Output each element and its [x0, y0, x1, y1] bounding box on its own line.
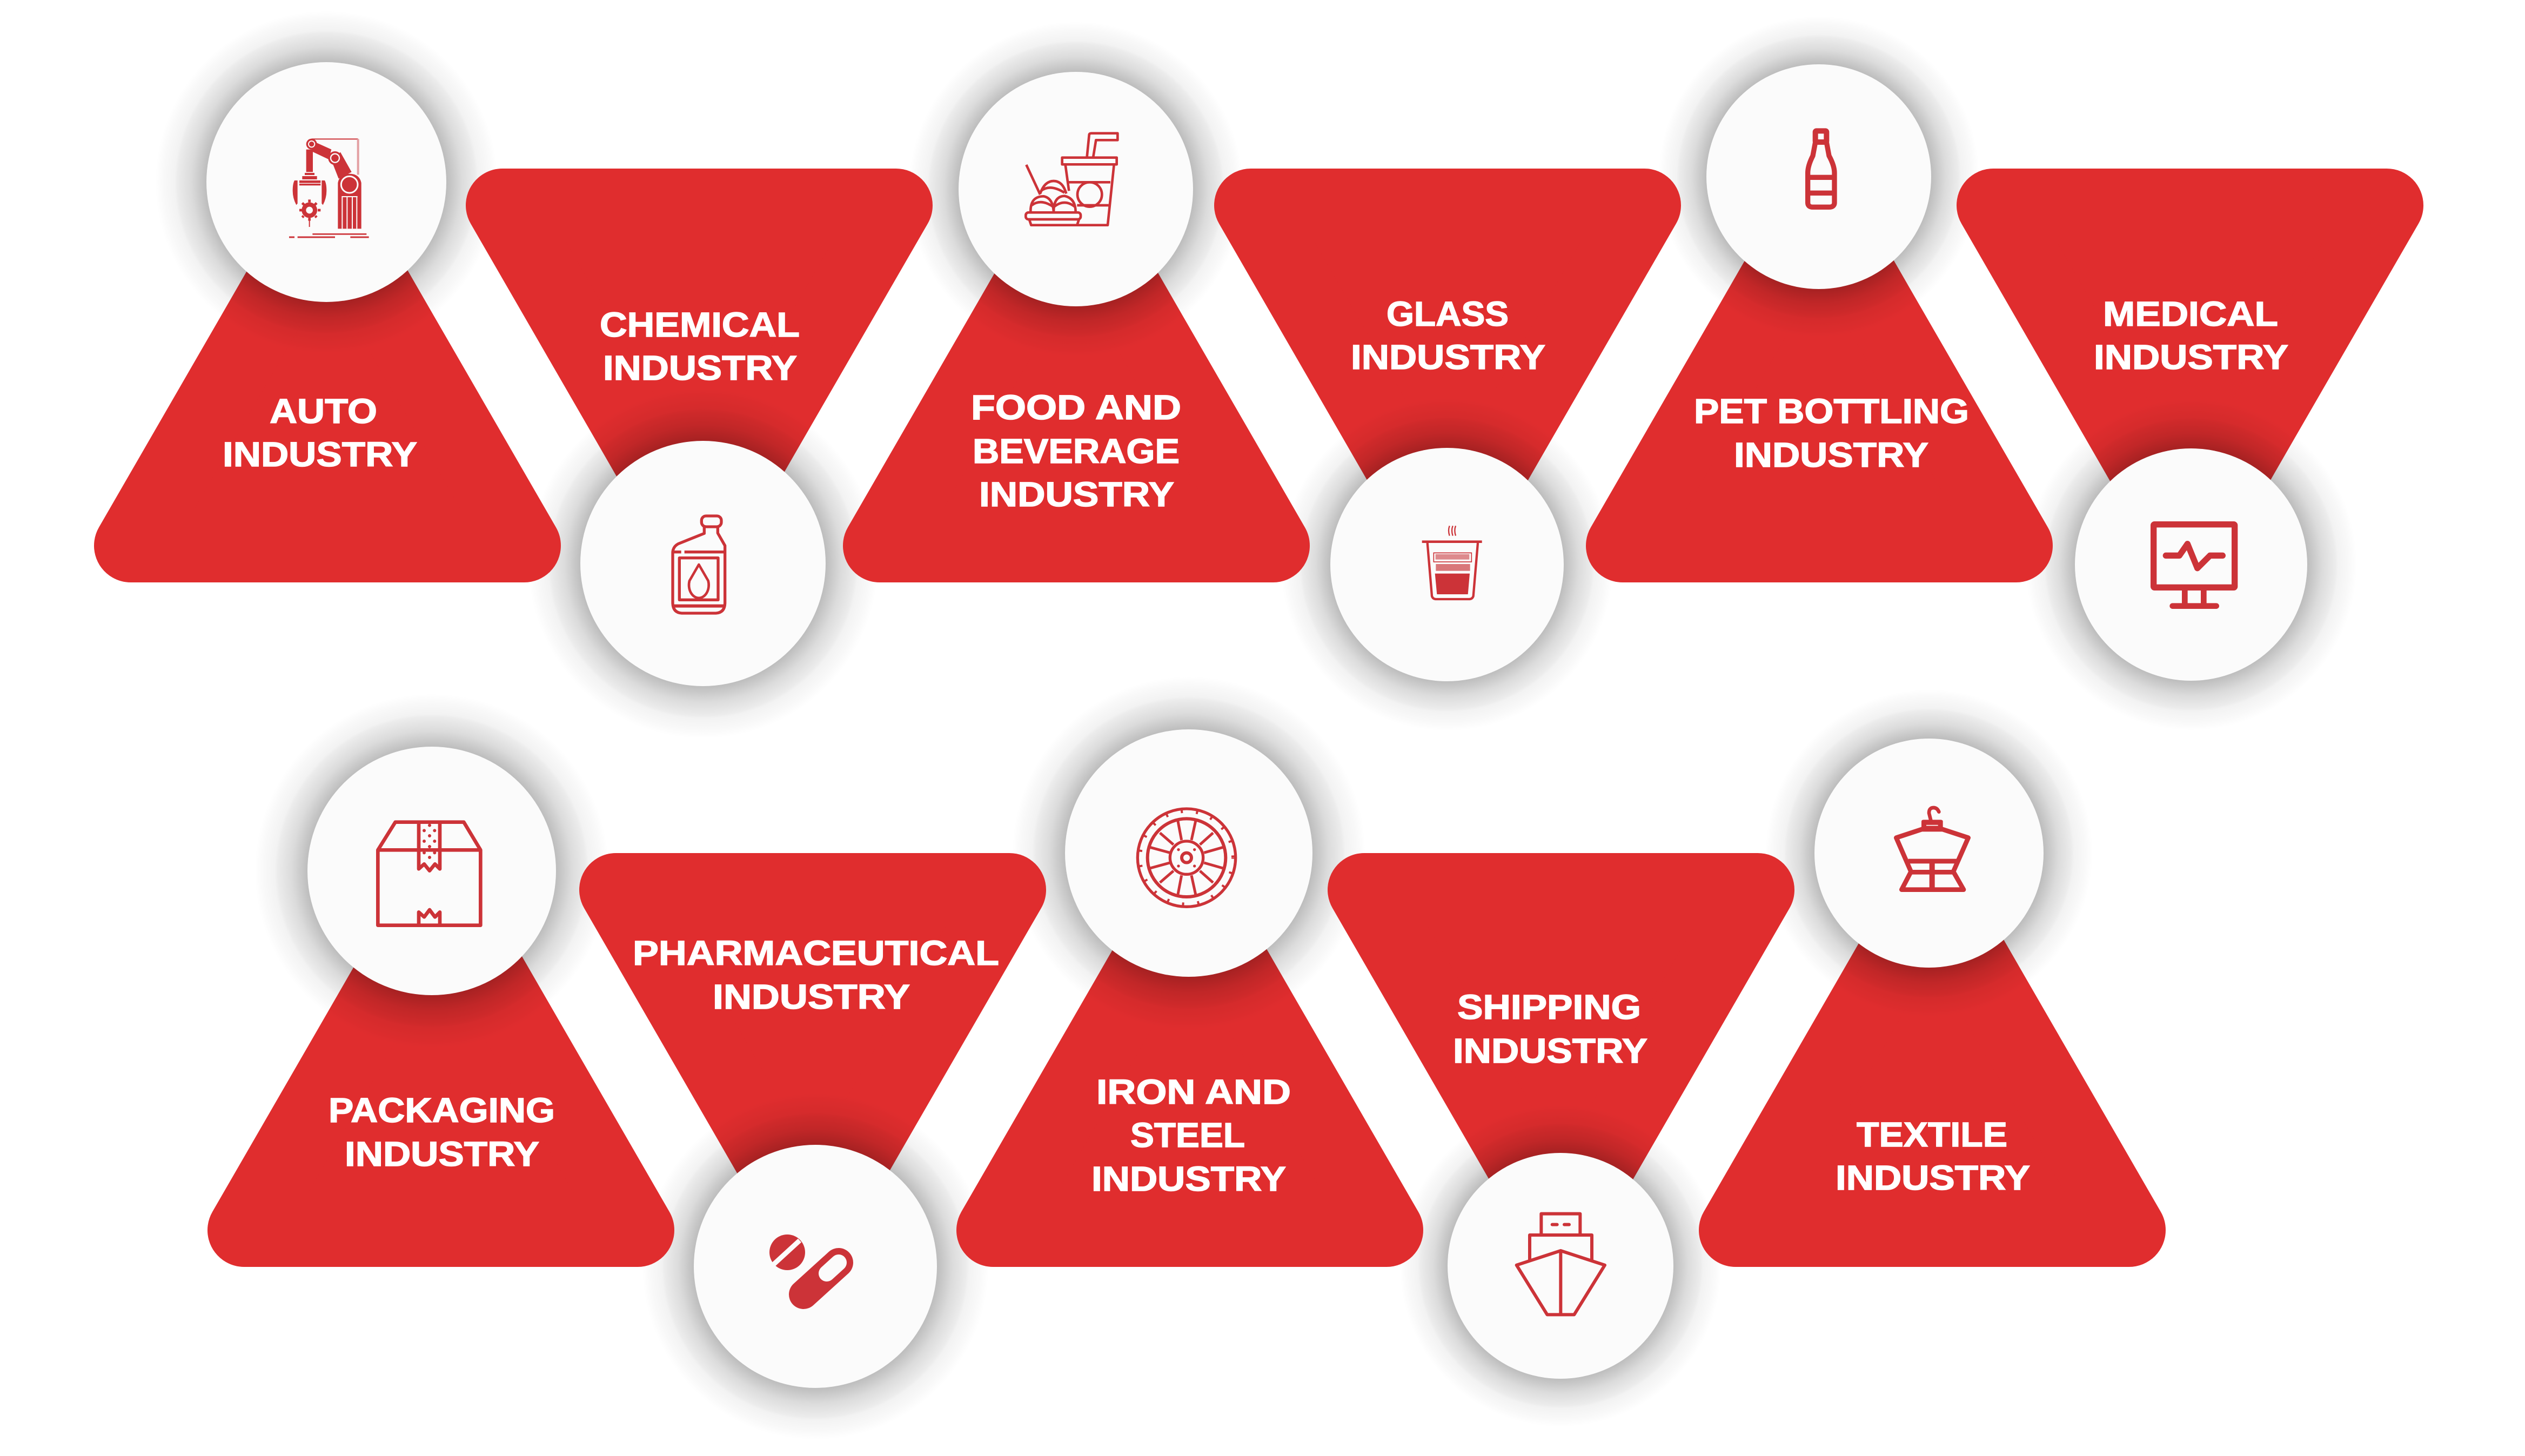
icon: robot arm	[289, 139, 369, 237]
label: glass industry	[1351, 294, 1545, 377]
label: iron and steel industry	[1091, 1072, 1291, 1198]
label: pharmaceutical industry	[633, 934, 999, 1016]
triangle: pet bottling industry	[1623, 205, 2016, 546]
panel: shipping industry	[1364, 890, 1758, 1427]
label: pharmaceutical industry: PHARMACEUTICAL	[633, 934, 999, 972]
icon circle: food and beverage industry	[959, 72, 1193, 306]
icon circle: medical industry	[2075, 448, 2307, 681]
label: food and beverage industry	[971, 388, 1181, 514]
label: medical industry: MEDICAL	[2103, 294, 2278, 333]
icon circle: textile industry	[1814, 739, 2044, 968]
icon: ship	[1517, 1214, 1605, 1314]
label: shipping industry	[1453, 988, 1647, 1070]
triangle: packaging industry	[244, 889, 638, 1230]
icon: cardboard box	[378, 822, 480, 925]
panel: textile industry	[1736, 689, 2129, 1230]
icon circle: packaging industry	[307, 747, 556, 995]
icon: garment on hanger	[1896, 808, 1968, 890]
icon circle: shipping industry	[1448, 1153, 1673, 1379]
triangle: iron and steel industry	[993, 889, 1387, 1230]
icon circle: pharmaceutical industry	[694, 1145, 937, 1388]
icon: pills	[769, 1234, 839, 1294]
label: chemical industry: INDUSTRY	[603, 348, 797, 387]
icon circle: pet bottling industry	[1706, 64, 1931, 289]
label: glass industry: GLASS	[1387, 294, 1509, 333]
label: glass industry: INDUSTRY	[1351, 338, 1545, 377]
icon: glass cup	[1422, 526, 1482, 599]
label: pet bottling industry: INDUSTRY	[1734, 435, 1928, 474]
icon: food and drink	[1026, 133, 1117, 225]
label: shipping industry: INDUSTRY	[1453, 1031, 1647, 1070]
triangle: medical industry	[1993, 205, 2387, 546]
icon circle: chemical industry	[580, 441, 826, 686]
triangle: chemical industry	[503, 205, 896, 546]
label: chemical industry	[600, 305, 800, 387]
label: textile industry: TEXTILE	[1857, 1115, 2007, 1154]
triangle: textile industry	[1736, 889, 2129, 1230]
panel: iron and steel industry	[993, 676, 1387, 1230]
label: chemical industry: CHEMICAL	[600, 305, 800, 344]
icon: medical monitor	[2154, 525, 2235, 606]
label: iron and steel industry: IRON AND	[1096, 1072, 1291, 1111]
label: packaging industry: PACKAGING	[329, 1091, 555, 1130]
label: food and beverage industry: FOOD AND	[971, 388, 1181, 427]
triangle: food and beverage industry	[880, 205, 1273, 546]
icon: bottle	[1808, 131, 1834, 207]
label: auto industry: AUTO	[270, 392, 377, 431]
icon: oil bottle	[673, 516, 725, 613]
label: pharmaceutical industry: INDUSTRY	[713, 977, 910, 1016]
label: packaging industry: INDUSTRY	[345, 1135, 539, 1173]
triangle: glass industry	[1251, 205, 1644, 546]
panel: pharmaceutical industry	[616, 890, 1009, 1440]
label: medical industry	[2094, 294, 2288, 377]
icon circle: iron and steel industry	[1065, 729, 1312, 977]
triangle: auto industry	[131, 205, 524, 546]
label: iron and steel industry: STEEL	[1130, 1116, 1245, 1155]
panel: auto industry	[131, 11, 524, 546]
label: food and beverage industry: BEVERAGE	[973, 432, 1180, 471]
label: textile industry	[1836, 1115, 2030, 1197]
label: iron and steel industry: INDUSTRY	[1091, 1159, 1286, 1198]
label: pet bottling industry: PET BOTTLING	[1694, 392, 1969, 431]
label: shipping industry: SHIPPING	[1457, 988, 1641, 1026]
panel: glass industry	[1251, 205, 1644, 731]
label: packaging industry	[329, 1091, 555, 1173]
label: pet bottling industry	[1694, 392, 1969, 474]
label: auto industry	[223, 392, 417, 474]
panel: chemical industry	[503, 205, 896, 739]
triangle: pharmaceutical industry	[616, 890, 1009, 1231]
icon: wheel	[1137, 809, 1236, 907]
triangle: shipping industry	[1364, 890, 1758, 1231]
label: textile industry: INDUSTRY	[1836, 1158, 2030, 1197]
icon circle: glass industry	[1330, 448, 1564, 681]
label: food and beverage industry: INDUSTRY	[979, 475, 1174, 514]
panel: pet bottling industry	[1623, 16, 2016, 546]
icon circle: auto industry	[206, 62, 446, 302]
label: auto industry: INDUSTRY	[223, 435, 417, 474]
panel: food and beverage industry	[880, 22, 1273, 546]
label: medical industry: INDUSTRY	[2094, 338, 2288, 377]
panel: medical industry	[1993, 205, 2387, 730]
panel: packaging industry	[244, 694, 638, 1230]
